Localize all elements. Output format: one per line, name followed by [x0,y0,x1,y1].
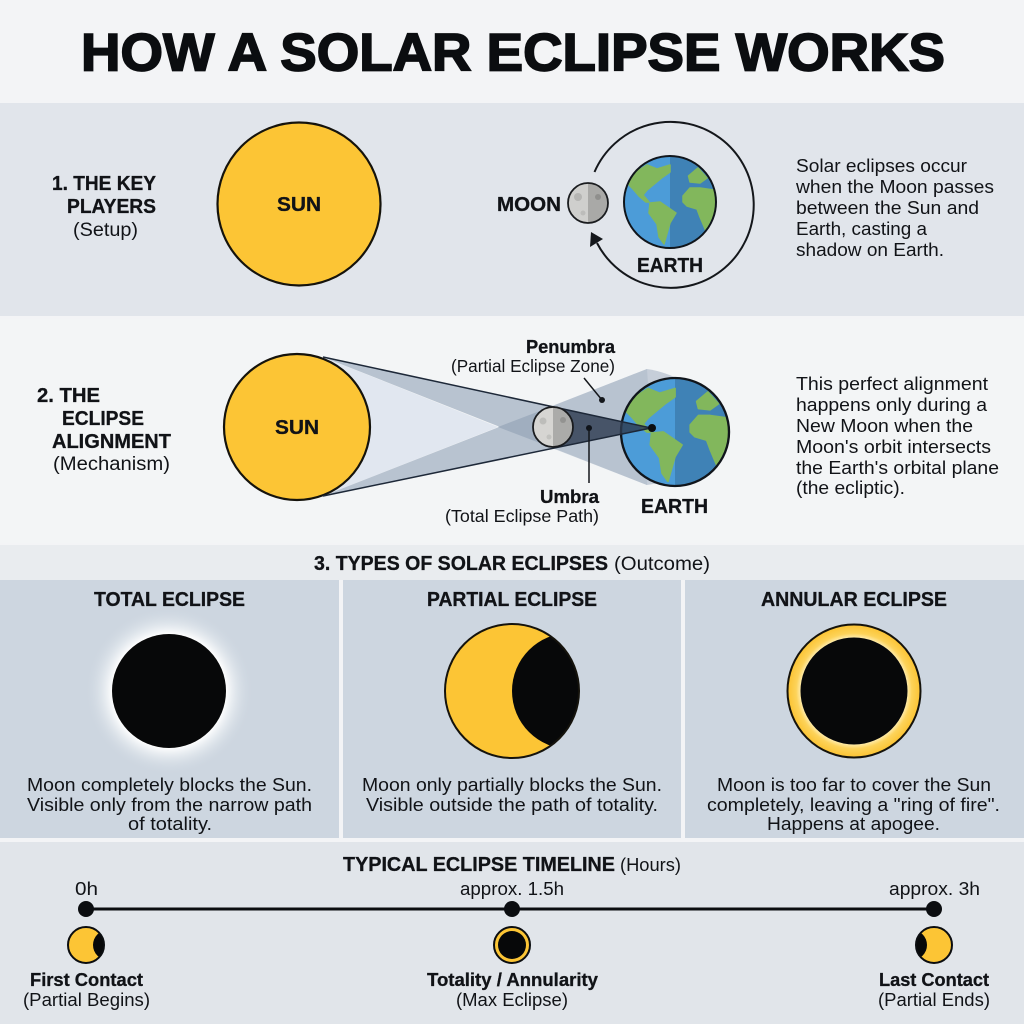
heading: eclipse alignment: ECLIPSE [62,408,144,430]
icon: annular eclipse [788,624,920,758]
arrow: moon orbit [590,122,754,288]
label: 0h: 0h [75,879,98,899]
label: first contact: (Partial Begins) [23,990,150,1010]
text block: alignment explanation: New Moon when the [796,416,973,436]
panel: key players [0,103,1024,316]
label: first contact: First Contact [30,970,143,990]
text block: alignment explanation [796,374,999,498]
heading: timeline: (Hours) [620,855,681,875]
heading: eclipse alignment: (Mechanism) [53,454,170,475]
label: totality [427,970,598,1010]
callout: umbra: (Total Eclipse Path) [445,506,599,526]
icon: sun [224,354,370,500]
icon: last contact [915,926,953,964]
heading: key players: 1. THE KEY [52,173,157,195]
label: earth: EARTH [641,496,708,518]
text block: setup explanation: when the Moon passes [795,177,994,197]
panel: partial eclipse [343,580,681,838]
text block: partial description: Moon only partially blocks the Sun. [362,775,662,795]
icon: totality [494,927,530,963]
heading: key players: (Setup) [73,220,138,241]
label: earth: EARTH [637,255,703,277]
text block: total description [27,775,312,834]
callout: umbra: Umbra [540,487,600,507]
heading: types of solar eclipses: 3. TYPES OF SOLAR ECLIPSES [314,553,608,575]
text block: annular description [707,775,1000,834]
heading: annular eclipse: ANNULAR ECLIPSE [761,589,947,611]
icon: first contact [67,926,105,964]
timeline axis [78,901,942,917]
panel: types heading band [0,545,1024,580]
label: totality: Totality / Annularity [427,970,598,990]
heading: eclipse alignment: 2. THE [37,385,100,407]
text block: setup explanation: shadow on Earth. [796,240,944,260]
callout: penumbra: Penumbra [526,337,616,357]
icon: moon [533,407,573,447]
text block: setup explanation: between the Sun and [796,198,979,218]
icon: moon [568,183,608,223]
heading: types of solar eclipses: (Outcome) [614,554,710,575]
chart: shadow cones [323,357,690,496]
text block: setup explanation [795,156,994,260]
text block: alignment explanation: (the ecliptic). [796,478,905,498]
heading: key players: PLAYERS [67,196,156,218]
text block: alignment explanation: Moon's orbit intersects [796,437,991,457]
heading: eclipse alignment [37,385,171,475]
callout: penumbra: (Partial Eclipse Zone) [451,356,615,376]
title: HOW A SOLAR ECLIPSE WORKS [81,24,945,82]
label: approx 3h: approx. 3h [889,879,980,899]
panel: annular eclipse [685,580,1024,838]
marker: umbra tip [648,424,656,432]
text block: total description: of totality. [128,814,212,834]
panel: total eclipse [0,580,339,838]
text block: annular description: Happens at apogee. [767,814,940,834]
callout: penumbra [451,337,616,403]
icon: partial eclipse [444,623,580,759]
label: first contact [23,970,150,1010]
icon: sun: SUN [277,194,321,216]
text block: alignment explanation: This perfect alignment [796,374,988,394]
text block: total description: Visible only from the narrow path [27,795,312,815]
heading: eclipse alignment: ALIGNMENT [52,431,171,453]
heading: partial eclipse: PARTIAL ECLIPSE [427,589,597,611]
shape: umbra [323,357,651,496]
icon: earth [621,378,729,486]
text block: total description: Moon completely blocks the Sun. [27,775,312,795]
text block: partial description [362,775,662,815]
text block: alignment explanation: happens only during a [796,395,988,415]
heading: timeline: TYPICAL ECLIPSE TIMELINE [343,854,615,876]
text block: annular description: completely, leaving a "ring of fire". [707,795,1000,815]
heading: total eclipse: TOTAL ECLIPSE [94,589,245,611]
label: last contact: Last Contact [879,970,989,990]
text block: alignment explanation: the Earth's orbital plane [796,458,999,478]
icon: total eclipse [85,607,253,775]
callout: umbra [445,425,600,526]
text block: setup explanation: Earth, casting a [796,219,928,239]
label: approx 1.5h: approx. 1.5h [460,879,564,899]
icon: sun [218,122,380,286]
text block: annular description: Moon is too far to cover the Sun [717,775,991,795]
label: last contact [878,970,990,1010]
heading: key players [52,173,157,241]
text block: setup explanation: Solar eclipses occur [796,156,967,176]
panel: timeline [0,842,1024,1024]
text block: partial description: Visible outside the path of totality. [366,795,658,815]
label: last contact: (Partial Ends) [878,990,990,1010]
icon: earth [624,156,716,248]
panel: eclipse alignment [0,319,1024,543]
label: moon: MOON [497,194,561,216]
icon: sun: SUN [275,417,319,439]
label: totality: (Max Eclipse) [456,990,568,1010]
